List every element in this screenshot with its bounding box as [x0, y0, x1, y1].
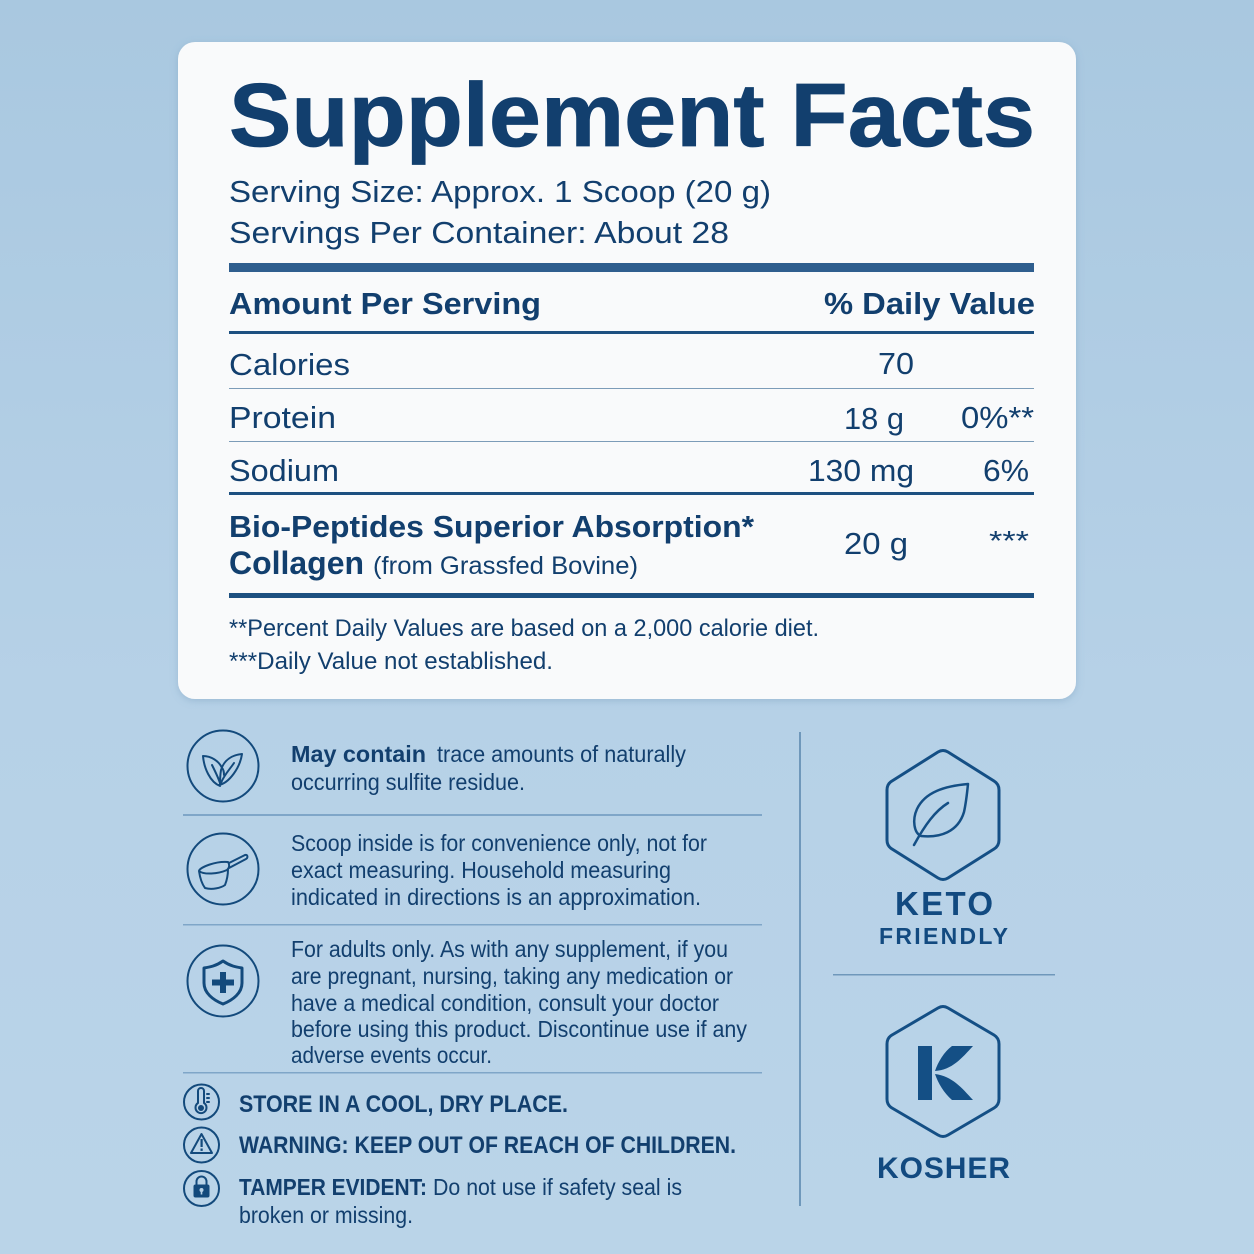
icon: plant sprout [188, 730, 258, 802]
row: protein: 0%** [961, 400, 1034, 435]
note: may contain: May contain [291, 741, 426, 767]
row: bio-peptides collagen: (from Grassfed Bovine) [373, 552, 638, 580]
row: bio-peptides collagen: *** [989, 525, 1029, 556]
row: sodium: Sodium [229, 453, 339, 488]
panel: certifications [833, 750, 1055, 1185]
row: calories [229, 346, 914, 382]
title: Supplement Facts [229, 66, 1035, 166]
table header: % Daily Value [824, 286, 1035, 321]
note: adults only: For adults only. As with any supplement, if you [291, 936, 728, 962]
label: keto friendly: KETO [895, 885, 993, 922]
icon: thermometer [184, 1084, 219, 1120]
badge: keto friendly [879, 750, 1008, 949]
label: kosher: KOSHER [877, 1152, 1010, 1185]
row: sodium [229, 453, 1029, 488]
table header: Amount Per Serving [229, 286, 541, 321]
icon: padlock [184, 1171, 219, 1206]
badge: kosher [877, 1006, 1010, 1185]
note: adults only: have a medical condition, consult your doctor [291, 990, 719, 1016]
serving information: Servings Per Container: About 28 [229, 215, 729, 250]
footnotes: **Percent Daily Values are based on a 2,000 calorie diet. [229, 615, 819, 642]
row: sodium: 130 mg [808, 453, 914, 488]
icon: warning triangle [184, 1128, 219, 1162]
note: may contain [291, 741, 686, 795]
note: adults only: adverse events occur. [291, 1042, 492, 1068]
tamper evident note: broken or missing. [239, 1202, 413, 1228]
panel: supplement facts card [178, 42, 1076, 699]
note: may contain: trace amounts of naturally [437, 741, 686, 767]
row: calories: Calories [229, 347, 350, 382]
icon: medical shield [188, 946, 258, 1016]
note: may contain: occurring sulfite residue. [291, 769, 525, 795]
row: sodium: 6% [983, 453, 1029, 488]
warning text: WARNING: KEEP OUT OF REACH OF CHILDREN. [239, 1132, 736, 1159]
note: adults only: are pregnant, nursing, taking any medication or [291, 963, 733, 989]
note: adults only: before using this product. Discontinue use if any [291, 1016, 747, 1042]
footnotes [229, 615, 819, 675]
note: scoop [291, 830, 707, 910]
note: adults only [291, 936, 747, 1068]
icon: leaf in hexagon [887, 750, 999, 880]
icon: K in hexagon [887, 1006, 999, 1136]
storage instruction: STORE IN A COOL, DRY PLACE. [239, 1091, 568, 1118]
row: calories: 70 [878, 346, 914, 381]
serving information [229, 174, 771, 250]
tamper evident note: Do not use if safety seal is [433, 1174, 682, 1200]
footnotes: ***Daily Value not established. [229, 648, 553, 675]
row: protein: Protein [229, 400, 336, 435]
icon: scoop [188, 834, 258, 904]
serving information: Serving Size: Approx. 1 Scoop (20 g) [229, 174, 771, 209]
table header [229, 286, 1035, 321]
label: keto friendly [879, 885, 1008, 949]
row: bio-peptides collagen: Bio-Peptides Superior Absorption* [229, 509, 755, 544]
row: bio-peptides collagen: 20 g [844, 526, 908, 561]
note: scoop: exact measuring. Household measuring [291, 857, 671, 883]
panel: advisory notes [183, 730, 762, 1228]
row: protein: 18 g [844, 401, 904, 436]
row: protein [229, 400, 1034, 436]
label: keto friendly: FRIENDLY [879, 923, 1008, 949]
row: bio-peptides collagen: Collagen [229, 545, 364, 581]
note: scoop: Scoop inside is for convenience only, not for [291, 830, 707, 856]
row: bio-peptides collagen [229, 509, 1029, 581]
tamper evident note [239, 1174, 682, 1228]
tamper evident note: TAMPER EVIDENT: [239, 1174, 427, 1200]
note: scoop: indicated in directions is an approximation. [291, 884, 701, 910]
